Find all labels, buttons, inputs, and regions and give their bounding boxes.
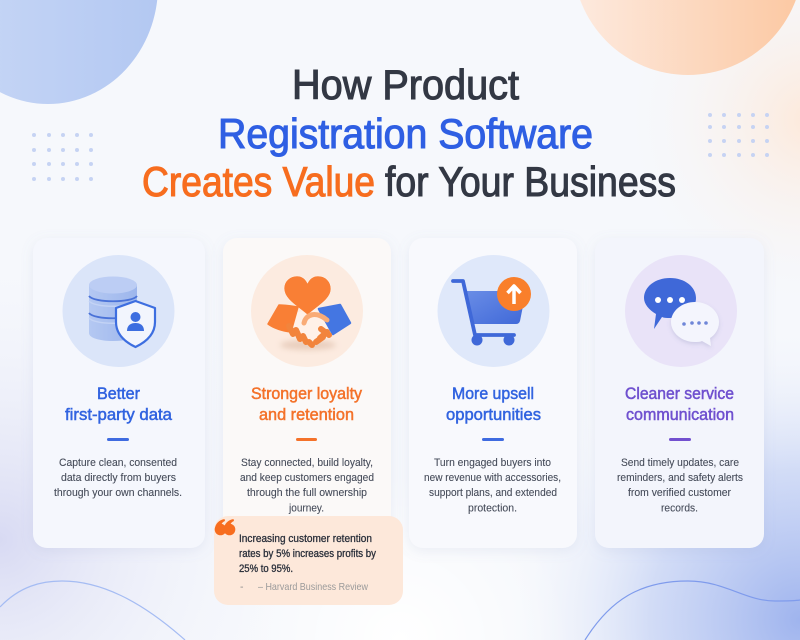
text block: protection. <box>468 502 517 514</box>
heading: opportunities <box>446 406 541 424</box>
text block: and keep customers engaged <box>240 472 374 484</box>
text block: Capture clean, consented <box>59 457 177 469</box>
heading: Stronger loyalty <box>251 385 363 403</box>
text block: through your own channels. <box>54 487 182 499</box>
heading: More upsell <box>452 385 534 403</box>
text block: reminders, and safety alerts <box>617 472 743 484</box>
icon: database with shield <box>62 255 174 367</box>
heading: Better <box>97 385 140 403</box>
text block: from verified customer <box>628 487 731 499</box>
attribution: – Harvard Business Review <box>258 581 368 593</box>
text block: Stay connected, build loyalty, <box>241 457 373 469</box>
quote text: rates by 5% increases profits by <box>239 548 377 560</box>
text block: records. <box>661 502 698 514</box>
heading <box>446 385 541 424</box>
title <box>142 61 676 205</box>
text block: Turn engaged buyers into <box>434 457 551 469</box>
heading: and retention <box>259 406 354 424</box>
heading: communication <box>626 406 734 424</box>
quote text: 25% to 95%. <box>239 563 293 575</box>
title: for Your Business <box>385 158 676 205</box>
text block <box>240 457 374 514</box>
text block <box>617 457 743 514</box>
heading <box>251 385 363 424</box>
icon: chat bubbles <box>625 255 737 367</box>
heading: first-party data <box>65 406 173 424</box>
icon: heart and handshake <box>251 255 363 367</box>
title: Registration Software <box>218 110 593 157</box>
text block: new revenue with accessories, <box>424 472 561 484</box>
text block: through the full ownership <box>247 487 367 499</box>
panel: more upsell opportunities <box>409 238 577 548</box>
attribution: - <box>240 581 244 593</box>
heading <box>625 385 734 424</box>
text block: Send timely updates, care <box>621 457 739 469</box>
callout: retention statistic <box>214 516 403 605</box>
panel: stronger loyalty and retention <box>223 238 391 548</box>
text block: journey. <box>288 502 324 514</box>
quote text: Increasing customer retention <box>239 533 372 545</box>
panel: better first-party data <box>33 238 205 548</box>
heading <box>65 385 173 424</box>
text block: data directly from buyers <box>61 472 176 484</box>
title: How Product <box>292 61 519 108</box>
text block <box>54 457 182 499</box>
title: Creates Value <box>142 158 375 205</box>
heading: Cleaner service <box>625 385 734 403</box>
panel: cleaner service communication <box>595 238 764 548</box>
text block <box>424 457 561 514</box>
text block: support plans, and extended <box>429 487 557 499</box>
icon: quotation mark <box>215 519 235 535</box>
quote text <box>239 533 377 575</box>
icon: shopping cart with up arrow <box>438 255 550 367</box>
